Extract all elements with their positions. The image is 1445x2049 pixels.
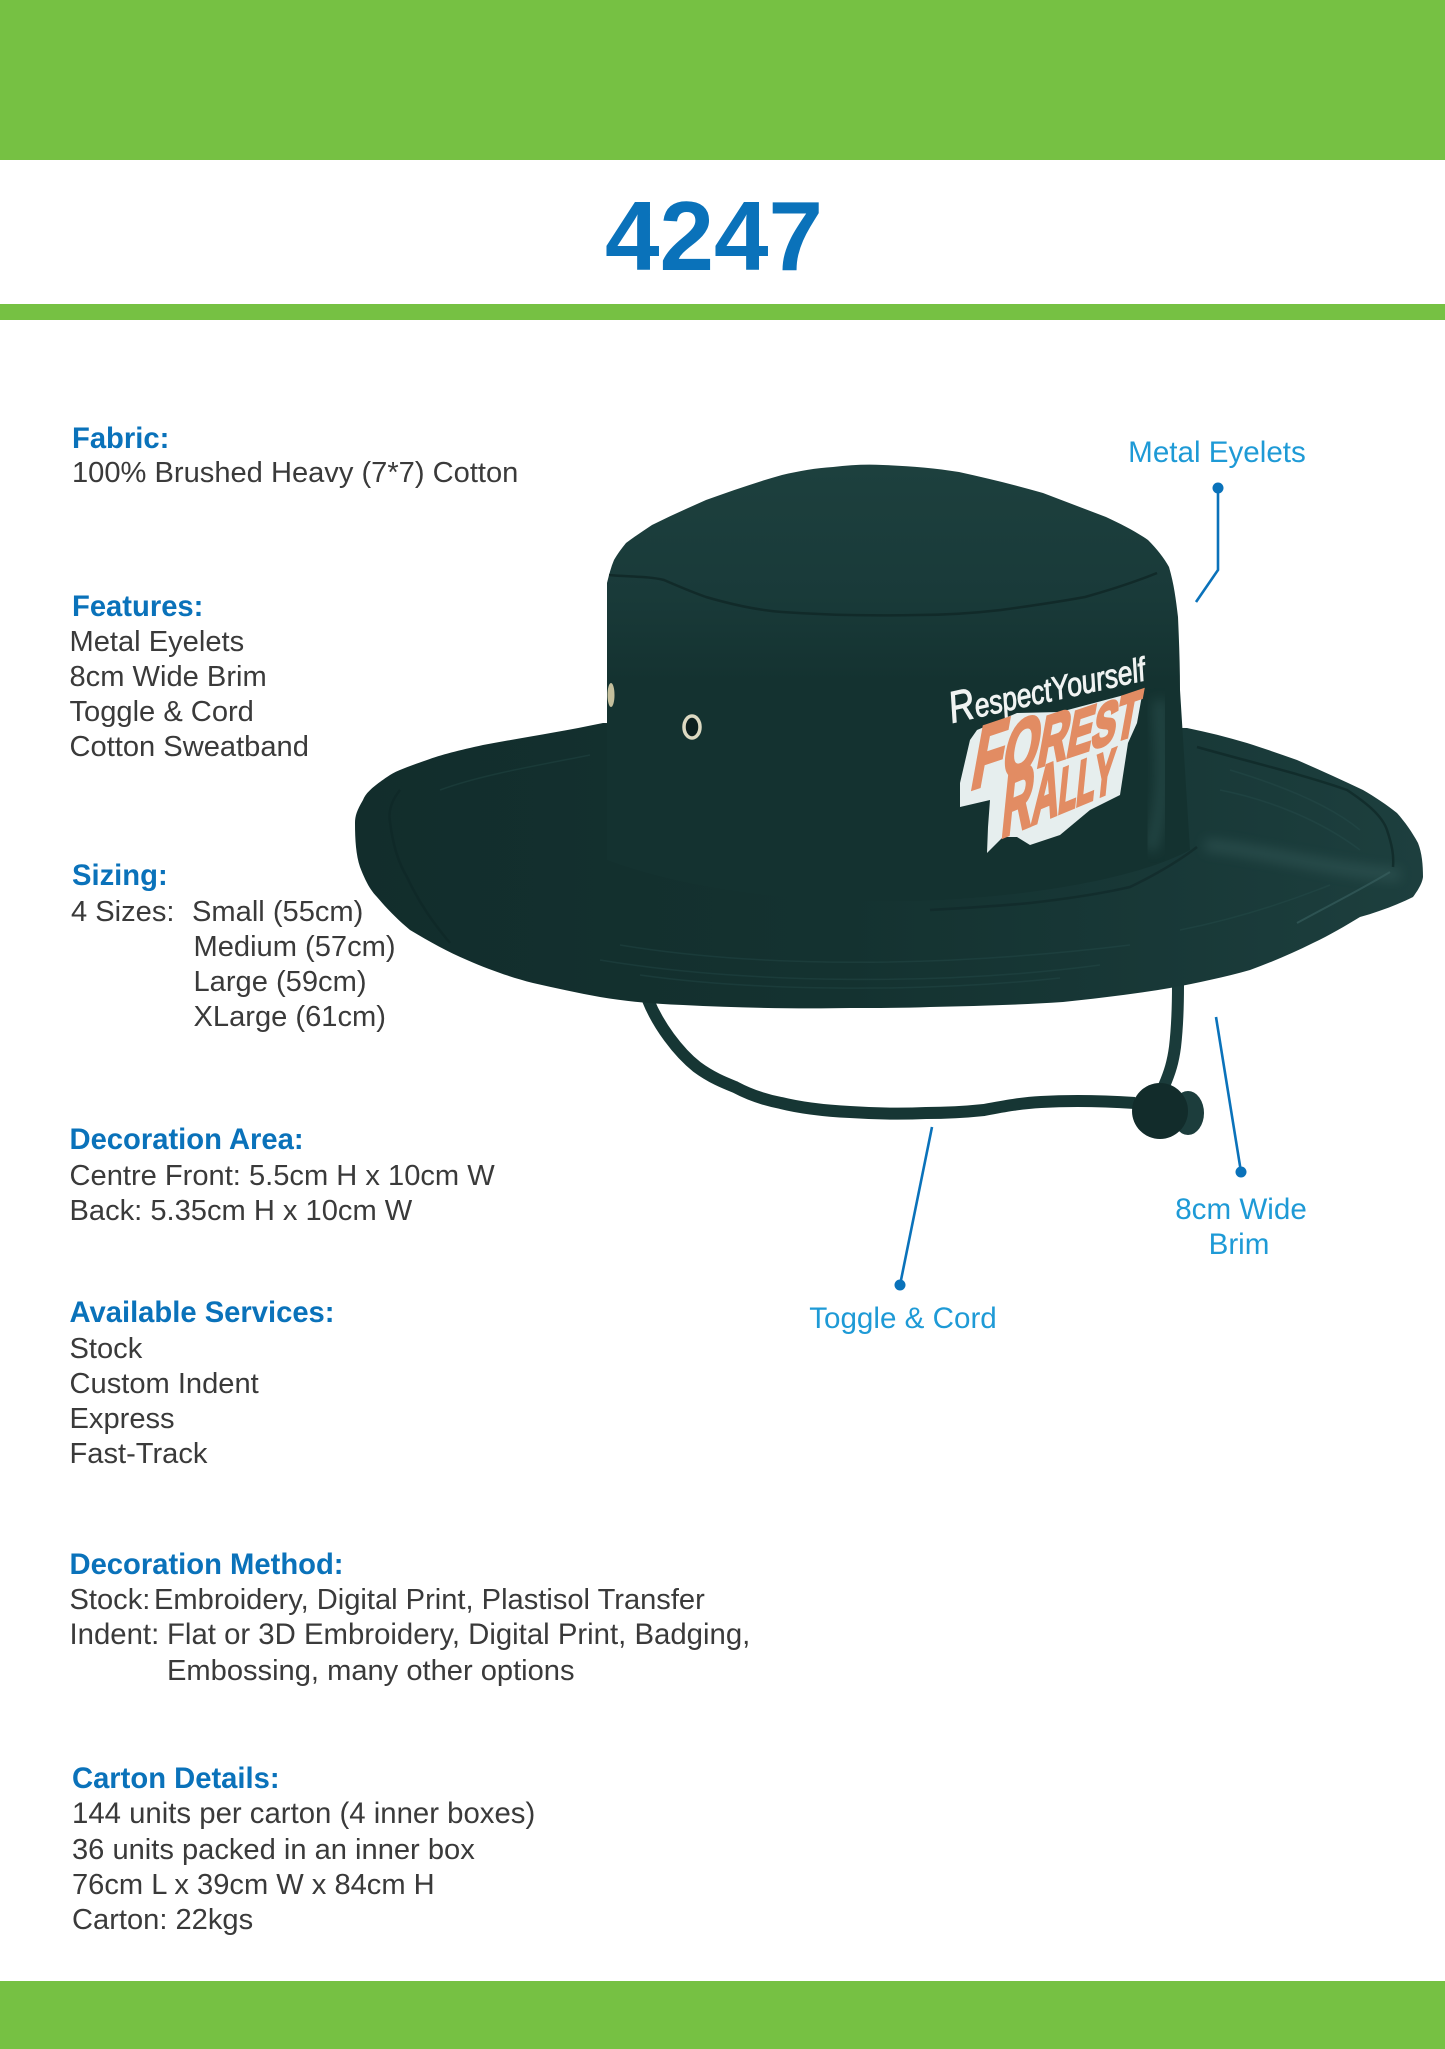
- text block: sizing: Medium (57cm): [194, 931, 396, 963]
- text block: sizing: 4 Sizes:: [71, 896, 174, 928]
- bottom green banner: [0, 1981, 1445, 2049]
- text block: fabric: Fabric:: [72, 423, 169, 455]
- text block: features: Cotton Sweatband: [70, 731, 309, 763]
- text block: decoration method: [70, 1549, 750, 1687]
- logo: Respect Yourself Forest Rally: [944, 641, 1152, 858]
- hat crown: [607, 465, 1190, 901]
- text block: fabric: [72, 423, 518, 489]
- text block: decoration area: [70, 1124, 495, 1227]
- logo: Respect Yourself Forest Rally: FOREST: [966, 652, 1151, 809]
- logo: Respect Yourself Forest Rally: RALLY: [998, 709, 1121, 858]
- text block: carton details: Carton Details:: [72, 1763, 280, 1795]
- hat crown highlight: [1150, 700, 1162, 850]
- callout: 8cm wide brim: [1175, 1017, 1307, 1261]
- callout: 8cm wide brim: 8cm Wide: [1175, 1193, 1307, 1226]
- title: product code: 4247: [605, 181, 823, 291]
- text block: decoration area: Decoration Area:: [70, 1124, 304, 1156]
- text block: sizing: Small (55cm): [192, 896, 363, 928]
- callout: metal eyelets: Metal Eyelets: [1128, 436, 1306, 469]
- text block: decoration method: Embroidery, Digital Print, Plastisol Transfer: [154, 1584, 705, 1616]
- text block: carton details: 36 units packed in an inner box: [72, 1834, 475, 1866]
- hat illustration: [355, 465, 1423, 1139]
- text block: decoration method: Embossing, many other options: [167, 1655, 575, 1687]
- text block: features: [70, 591, 309, 763]
- text block: available services: Express: [70, 1403, 175, 1435]
- eyelet side: [608, 683, 614, 707]
- text block: available services: Fast-Track: [70, 1438, 208, 1470]
- text block: sizing: [71, 860, 396, 1033]
- text block: decoration method: Indent:: [70, 1618, 159, 1651]
- text block: sizing: Large (59cm): [194, 966, 367, 998]
- text block: features: Features:: [72, 591, 203, 623]
- hat brim: [355, 723, 1423, 1008]
- text block: carton details: Carton: 22kgs: [72, 1904, 253, 1936]
- text block: fabric: 100% Brushed Heavy (7*7) Cotton: [72, 457, 518, 489]
- hat crown seam: [609, 573, 1157, 615]
- text block: features: Metal Eyelets: [70, 626, 244, 658]
- text block: carton details: [72, 1763, 535, 1936]
- text block: sizing: Sizing:: [72, 860, 168, 892]
- callout: 8cm wide brim: Brim: [1209, 1228, 1269, 1261]
- top green banner: [0, 0, 1445, 160]
- text block: features: Toggle & Cord: [70, 696, 254, 728]
- text block: features: 8cm Wide Brim: [70, 661, 267, 693]
- text block: decoration area: Back: 5.35cm H x 10cm W: [70, 1195, 413, 1227]
- callout: toggle and cord: Toggle & Cord: [809, 1302, 997, 1335]
- text block: sizing: XLarge (61cm): [194, 1001, 386, 1033]
- hat brim light streak: [1205, 845, 1400, 875]
- text block: carton details: 144 units per carton (4 inner boxes): [72, 1797, 535, 1830]
- text block: decoration method: Flat or 3D Embroidery, Digital Print, Badging,: [167, 1618, 750, 1651]
- hat cord and toggle: [648, 985, 1204, 1139]
- green divider bar: [0, 304, 1445, 320]
- logo: Respect Yourself Forest Rally: RespectYourself: [944, 641, 1152, 733]
- text block: available services: Stock: [70, 1333, 143, 1365]
- text block: decoration method: Stock:: [70, 1584, 150, 1616]
- hat brim stitching: [389, 747, 1393, 943]
- hat brim seam highlight: [1297, 872, 1390, 923]
- text block: decoration method: Decoration Method:: [70, 1549, 344, 1581]
- text block: carton details: 76cm L x 39cm W x 84cm H: [72, 1869, 435, 1901]
- text block: decoration area: Centre Front: 5.5cm H x 10cm W: [70, 1160, 495, 1192]
- text block: available services: Available Services:: [70, 1297, 335, 1329]
- hat brim fabric ribs: [440, 755, 1360, 988]
- hat band seam: [930, 847, 1197, 910]
- text block: available services: [70, 1297, 335, 1470]
- eyelet front: [684, 716, 700, 738]
- callout: toggle and cord: [809, 1127, 997, 1335]
- text block: available services: Custom Indent: [70, 1368, 259, 1400]
- callout: metal eyelets: [1128, 436, 1306, 602]
